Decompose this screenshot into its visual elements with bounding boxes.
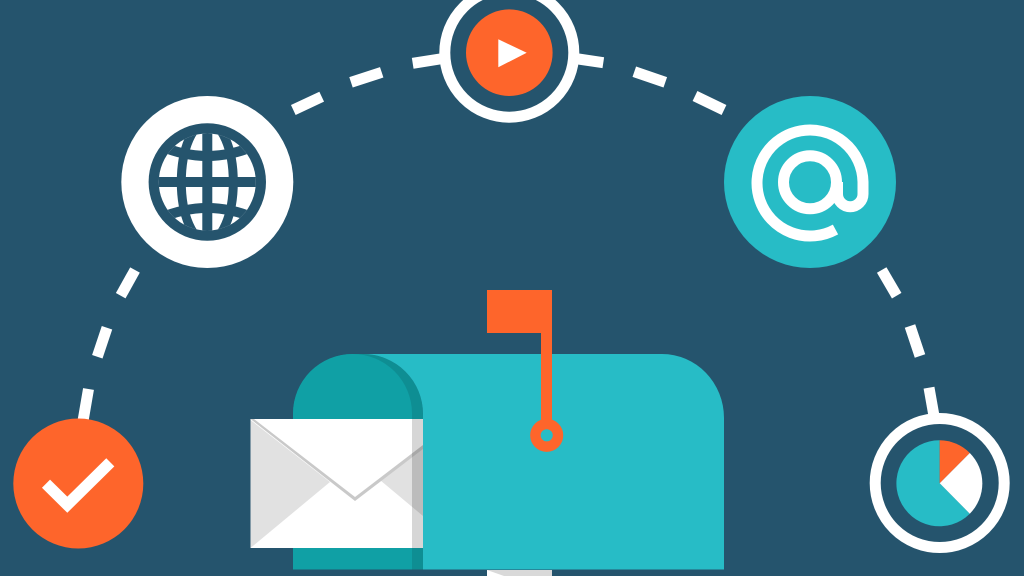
icon: video play (445, 0, 574, 117)
mailbox body (363, 354, 724, 570)
icon: globe (121, 96, 293, 268)
icon: pie chart (875, 418, 1004, 548)
icon: check mark (13, 418, 143, 548)
icon: at sign (724, 96, 896, 268)
envelope stub below mailbox (487, 570, 552, 576)
envelope (250, 419, 423, 548)
flag (487, 290, 558, 447)
mailbox (293, 354, 724, 570)
mailbox door (293, 354, 423, 570)
dashed arc connecting icons (83, 58, 934, 421)
